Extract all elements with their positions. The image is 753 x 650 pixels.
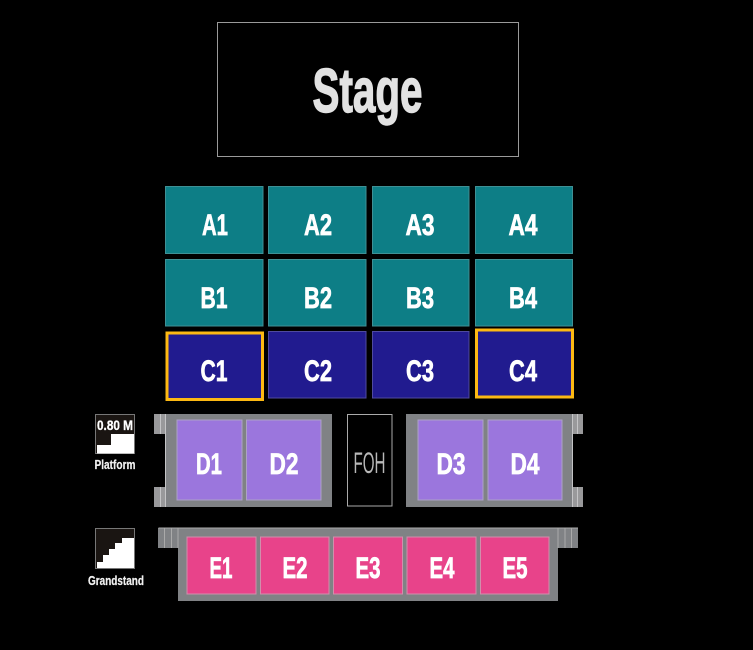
section A: A1 xyxy=(202,209,228,242)
section A: A4 xyxy=(508,209,538,242)
platform right: D4 xyxy=(510,448,540,481)
section B xyxy=(166,260,572,326)
section C: C2 xyxy=(304,355,332,388)
section B: B3 xyxy=(406,282,434,315)
section C xyxy=(167,330,572,400)
FOH: FOH xyxy=(354,447,386,480)
grandstand: E4 xyxy=(430,552,455,585)
section B: B1 xyxy=(200,282,228,315)
icon: grandstand xyxy=(96,528,134,568)
platform left xyxy=(154,414,332,507)
platform right: D3 xyxy=(436,448,466,481)
platform left: D1 xyxy=(196,448,222,481)
section C: C4 xyxy=(509,355,537,388)
grandstand: E3 xyxy=(356,552,380,585)
grandstand: E2 xyxy=(282,552,308,585)
stage: Stage xyxy=(312,57,422,126)
section C: C3 xyxy=(406,355,434,388)
platform label: Platform xyxy=(94,458,136,472)
section B: B2 xyxy=(304,282,332,315)
grandstand xyxy=(158,528,578,601)
icon: platform: 0.80 M xyxy=(97,417,133,433)
section A: A3 xyxy=(406,209,434,242)
grandstand: E1 xyxy=(210,552,232,585)
section A xyxy=(166,186,572,254)
icon: platform xyxy=(96,414,134,454)
stage xyxy=(218,22,518,156)
FOH xyxy=(348,414,392,506)
grandstand: E5 xyxy=(502,552,528,585)
platform left: D2 xyxy=(270,448,298,481)
section A: A2 xyxy=(304,209,332,242)
section B: B4 xyxy=(509,282,537,315)
platform right xyxy=(406,414,583,507)
grandstand label: Grandstand xyxy=(88,574,144,588)
section C: C1 xyxy=(200,355,228,388)
